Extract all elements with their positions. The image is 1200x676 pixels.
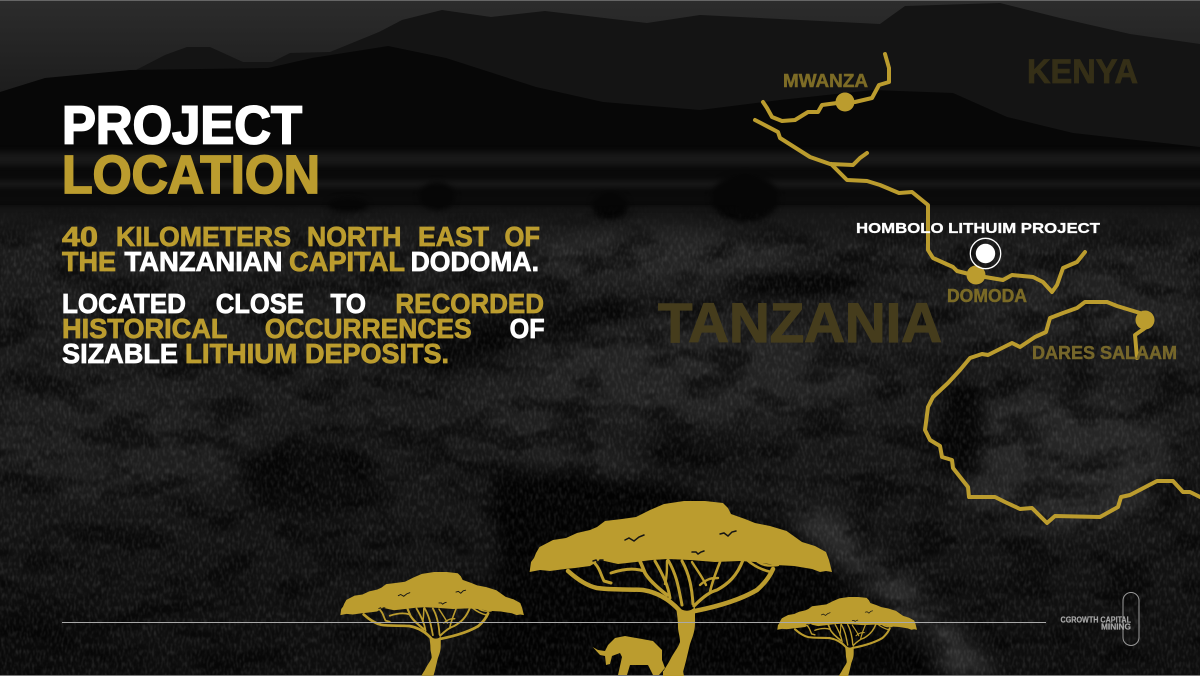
text block: nearby lithium deposits: DEPOSITS. bbox=[305, 338, 449, 369]
text block: distance from Dodoma: OF bbox=[504, 221, 540, 252]
footer line bbox=[62, 622, 1046, 623]
elephant silhouette bbox=[593, 636, 665, 675]
title: PROJECT bbox=[62, 96, 302, 156]
acacia tree: right bbox=[777, 597, 917, 676]
text block: nearby lithium deposits: SIZABLE bbox=[62, 338, 178, 369]
text block: distance from Dodoma: 40 bbox=[62, 221, 98, 252]
text block: distance from Dodoma: NORTH bbox=[307, 221, 402, 252]
marker: Domoda bbox=[947, 266, 1027, 306]
text block: nearby lithium deposits: LITHIUM bbox=[185, 338, 297, 369]
text block: distance from Dodoma: KILOMETERS bbox=[116, 221, 291, 252]
marker: Dares Salaam: DARES SALAAM bbox=[1032, 343, 1177, 363]
text block: distance from Dodoma: THE bbox=[62, 246, 116, 277]
text block: distance from Dodoma: TANZANIAN bbox=[124, 246, 282, 277]
marker: Hombolo Lithium Project: HOMBOLO LITHUIM PROJECT bbox=[856, 221, 1100, 237]
text block: distance from Dodoma bbox=[62, 221, 540, 277]
text block: nearby lithium deposits: HISTORICAL bbox=[62, 313, 228, 344]
text block: distance from Dodoma: DODOMA. bbox=[411, 246, 539, 277]
text block: distance from Dodoma: EAST bbox=[418, 221, 489, 252]
marker: Hombolo Lithium Project bbox=[856, 221, 1100, 269]
marker: Mwanza bbox=[783, 71, 868, 112]
acacia tree: centre bbox=[530, 501, 832, 676]
acacia tree: left bbox=[340, 572, 524, 676]
text block: nearby lithium deposits bbox=[62, 288, 545, 369]
text block: nearby lithium deposits: OF bbox=[510, 313, 545, 344]
text block: nearby lithium deposits: TO bbox=[330, 288, 366, 319]
text block: nearby lithium deposits: OCCURRENCES bbox=[265, 313, 472, 344]
text block: distance from Dodoma: CAPITAL bbox=[289, 246, 405, 277]
logo: CGrowth Capital Mining: CGROWTH CAPITAL bbox=[1060, 616, 1131, 624]
title bbox=[62, 96, 320, 205]
text block: nearby lithium deposits: LOCATED bbox=[62, 288, 186, 319]
marker: Mwanza: MWANZA bbox=[783, 71, 868, 91]
map of Tanzania bbox=[658, 53, 1200, 523]
label: Tanzania: TANZANIA bbox=[658, 291, 942, 354]
text block: nearby lithium deposits: RECORDED bbox=[395, 288, 544, 319]
label: Kenya: KENYA bbox=[1027, 53, 1138, 91]
marker: Dares Salaam bbox=[1032, 310, 1177, 363]
title: LOCATION bbox=[62, 145, 320, 205]
map borders and rivers bbox=[755, 54, 1200, 523]
logo: CGrowth Capital Mining: MINING bbox=[1101, 622, 1131, 632]
marker: Domoda: DOMODA bbox=[947, 286, 1027, 306]
logo: CGrowth Capital Mining bbox=[1060, 592, 1139, 646]
text block: nearby lithium deposits: CLOSE bbox=[216, 288, 304, 319]
